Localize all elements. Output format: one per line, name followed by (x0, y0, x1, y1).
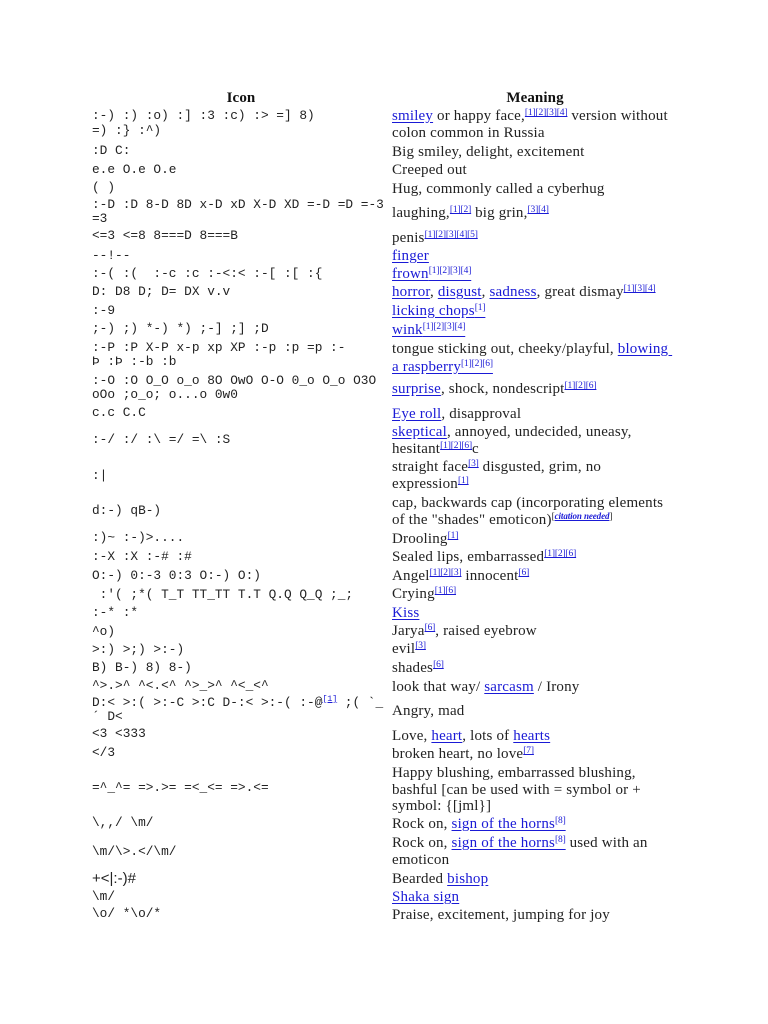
icon row: eye roll: c.c C.C (92, 405, 146, 420)
meaning: skeptical: hesitant[1][2][6]c (392, 441, 479, 457)
icon row: tongue: Þ :Þ :-b :b (92, 354, 176, 369)
meaning: blushing: bashful [can be used with = symbol or + (392, 782, 641, 798)
icon row: smiley: :-) :) :o) :] :3 :c) :> =] 8) (92, 108, 315, 123)
meaning: cap (392, 495, 663, 528)
icon row: finger: --!-- (92, 248, 130, 263)
icon row: skeptical: :-/ :/ :\ =/ =\ :S (92, 432, 230, 447)
meaning: angel: Angel[1][2][3] innocent[6] (392, 568, 529, 584)
icon row: drooling: :)~ :-)>.... (92, 530, 184, 545)
icon row: surprise (92, 373, 376, 402)
icon row: tongue (92, 340, 345, 369)
icon row: shades: B) B-) 8) 8-) (92, 660, 192, 675)
meaning: creeped out: Creeped out (392, 162, 467, 178)
meaning: straight face (392, 459, 601, 492)
icon row: angry: ´ D< (92, 708, 123, 724)
meaning: skeptical: skeptical, annoyed, undecided, uneasy, (392, 424, 632, 440)
meaning: cap: of the "shades" emoticon)[citation needed] (392, 510, 612, 528)
icon row: cap: d:-) qB-) (92, 503, 161, 518)
meaning: frown: frown[1][2][3][4] (392, 266, 471, 282)
meaning: skeptical (392, 424, 632, 457)
icon row: jarya: ^o) (92, 624, 115, 639)
icon row: laughing: :-D :D 8-D 8D x-D xD X-D XD =-D =D =-3 (92, 197, 384, 212)
meaning: tongue (392, 341, 672, 375)
meaning: tongue: tongue sticking out, cheeky/playful, blowing (392, 341, 668, 357)
icon row: penis: <=3 <=8 8===D 8===B (92, 228, 238, 243)
heading: Icon column: Icon (227, 90, 255, 106)
icon row: horror: D: D8 D; D= DX v.v (92, 284, 230, 299)
icon row: kiss: :-* :* (92, 605, 138, 620)
meaning: finger: finger (392, 248, 429, 264)
meaning: drooling: Drooling[1] (392, 531, 458, 547)
icon row: look that way: ^>.>^ ^<.<^ ^>_>^ ^<_<^ (92, 678, 269, 693)
meaning: blushing (392, 765, 641, 814)
meaning: angry: Angry, mad (392, 703, 464, 719)
meaning: eye roll: Eye roll, disapproval (392, 406, 521, 422)
icon row: laughing: =3 (92, 210, 107, 226)
meaning: smiley (392, 108, 668, 141)
meaning: bearded bishop: Bearded bishop (392, 871, 488, 887)
meaning: shaka sign: Shaka sign (392, 889, 459, 905)
meaning: wink: wink[1][2][3][4] (392, 322, 465, 338)
meaning: love: Love, heart, lots of hearts (392, 728, 550, 744)
icon row: praise: \o/ *\o/* (92, 906, 161, 921)
icon row: wink: ;-) ;) *-) *) ;-] ;] ;D (92, 321, 269, 336)
icon row: smiley: =) :} :^) (92, 122, 161, 138)
icon row: big smiley: :D C: (92, 143, 130, 158)
meaning: licking chops: licking chops[1] (392, 303, 485, 319)
meaning: crying: Crying[1][6] (392, 586, 456, 602)
meaning: laughing: laughing,[1][2] big grin,[3][4] (392, 205, 549, 221)
meaning: broken heart: broken heart, no love[7] (392, 746, 534, 762)
meaning: praise: Praise, excitement, jumping for joy (392, 907, 610, 923)
meaning: jarya: Jarya[6], raised eyebrow (392, 623, 537, 639)
heading: Meaning column: Meaning (506, 90, 564, 106)
icon row: angel: O:-) 0:-3 0:3 O:-) O:) (92, 568, 261, 583)
icon row: crying: :'( ;*( T_T TT_TT T.T Q.Q Q_Q ;_; (100, 587, 353, 602)
icon row: smiley (92, 108, 315, 138)
icon row: creeped out: e.e O.e O.e (92, 162, 176, 177)
meaning: blushing: symbol: {[jml}] (392, 798, 491, 814)
meaning: hug: Hug, commonly called a cyberhug (392, 181, 605, 197)
icon row: broken heart: </3 (92, 745, 115, 760)
meaning: look that way: look that way/ sarcasm / Irony (392, 679, 579, 695)
meaning: rock on emoticon (392, 835, 648, 868)
meaning: tongue: a raspberry[1][2][6] (392, 359, 493, 375)
icon row: blushing: =^_^= =>.>= =<_<= =>.<= (92, 780, 269, 795)
icon row: licking chops: :-9 (92, 303, 115, 318)
icon row: bearded bishop: +<|:-)# (92, 870, 136, 887)
meaning: shades: shades[6] (392, 660, 444, 676)
meaning: penis: penis[1][2][3][4][5] (392, 230, 478, 246)
icon row: surprise: oOo ;o_o; o...o 0w0 (92, 386, 238, 402)
icon row: surprise: :-O :O O_O o_o 8O OwO O-O 0_o O_o O3O (92, 373, 376, 388)
icon row: straight face: :| (92, 468, 107, 483)
icon row: evil: >:) >;) >:-) (92, 642, 184, 657)
meaning: evil: evil[3] (392, 641, 426, 657)
icon row: shaka sign: \m/ (92, 889, 115, 904)
meaning: kiss: Kiss (392, 605, 419, 621)
meaning: sealed lips: Sealed lips, embarrassed[1][2][6] (392, 549, 576, 565)
meaning: rock on: Rock on, sign of the horns[8] (392, 816, 566, 832)
meaning: big smiley: Big smiley, delight, excitement (392, 144, 584, 160)
meaning: rock on emoticon: emoticon (392, 852, 449, 868)
icon row: angry: D:< >:( >:-C >:C D-:< >:-( :-@[1] ;( `_ (92, 694, 383, 710)
icon row: angry (92, 694, 384, 724)
icon row: tongue: :-P :P X-P x-p xp XP :-p :p =p :- (92, 340, 345, 355)
icon row: rock on emoticon: \m/\>.</\m/ (92, 844, 176, 859)
meaning: horror: horror, disgust, sadness, great dismay[1][3][4] (392, 284, 656, 300)
meaning: blushing: Happy blushing, embarrassed blushing, (392, 765, 636, 781)
icon row: hug: ( ) (92, 180, 115, 195)
icon row: sealed lips: :-X :X :-# :# (92, 549, 192, 564)
icon row: laughing (92, 197, 384, 226)
icon row: love: <3 <333 (92, 726, 146, 741)
icon row: rock on: \,,/ \m/ (92, 815, 153, 830)
meaning: straight face: straight face[3] disgusted, grim, no (392, 459, 601, 475)
meaning: smiley: colon common in Russia (392, 125, 545, 141)
meaning: surprise: surprise, shock, nondescript[1][2][6] (392, 381, 596, 397)
meaning: smiley: smiley or happy face,[1][2][3][4] version without (392, 108, 668, 124)
icon row: frown: :-( :( :-c :c :-<:< :-[ :[ :{ (92, 266, 322, 281)
meaning: rock on emoticon: Rock on, sign of the horns[8] used with an (392, 835, 648, 851)
meaning: cap: cap, backwards cap (incorporating elements (392, 495, 663, 511)
meaning: straight face: expression[1] (392, 476, 469, 492)
